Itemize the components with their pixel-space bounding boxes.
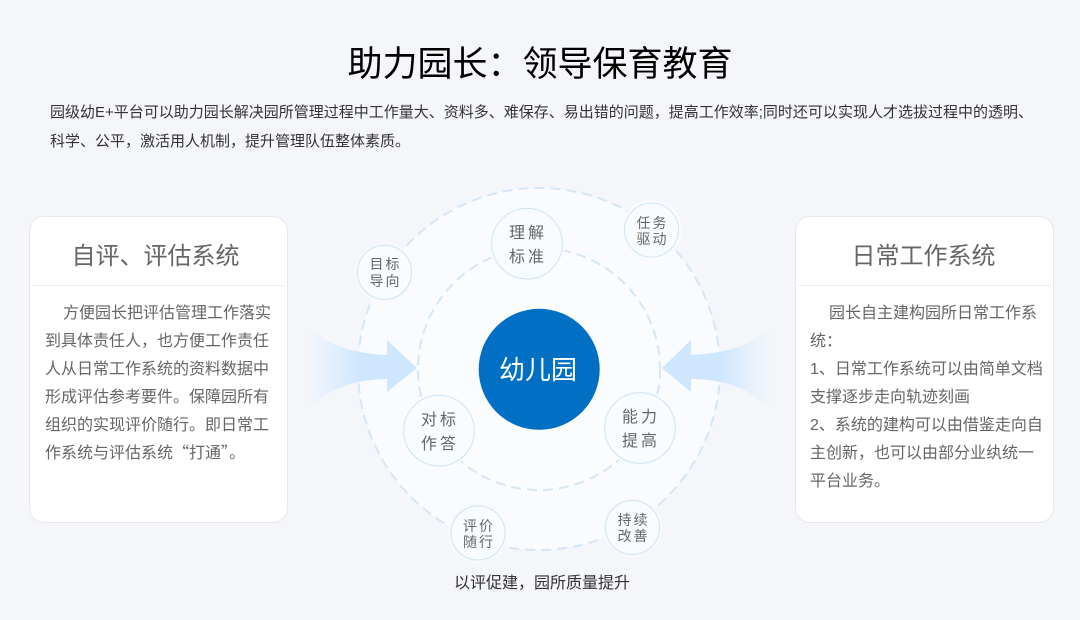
node: 对标作答: 作答 [421,435,459,453]
heading: daily work: 日常工作系统 [852,242,996,270]
node: 持续改善 [602,498,662,558]
text: self evaluation description: 组织的实现评价随行。即日常工 [45,416,269,434]
intro text: 园级幼E+平台可以助力园长解决园所管理过程中工作量大、资料多、难保存、易出错的问题，提高工作效率;同时还可以实现人才选拔过程中的透明、 [50,104,1033,121]
center circle [479,309,600,430]
text: self evaluation description: 人从日常工作系统的资料数据中 [45,360,269,378]
node: 评价随行: 评价 [463,518,495,534]
node: 能力提高 [602,390,678,466]
node: 持续改善: 持续 [618,512,650,528]
node: 理解标准: 理解 [509,224,547,242]
node: 任务驱动: 任务 [636,215,668,231]
node: 目标导向 [354,242,414,302]
text: daily work description [810,304,1043,490]
panel: self evaluation system [29,216,288,522]
title: 助力园长：领导保育教育 [347,45,732,84]
outer ring [358,188,720,550]
text: daily work description: 2、系统的建构可以由借鉴走向自 [810,416,1043,434]
node: 评价随行 [448,503,508,563]
node: 对标作答: 对标 [421,411,459,429]
text: self evaluation description: 到具体责任人，也方便工作责任 [45,332,269,350]
panel: daily work system [795,216,1054,522]
text: daily work description: 园长自主建构园所日常工作系 [829,304,1037,322]
intro text [50,104,1033,150]
text: daily work description: 统： [810,332,842,350]
text: self evaluation description: 形成评估参考要件。保障园所有 [45,388,269,406]
arrow: left [307,327,417,410]
text: self evaluation description [45,304,271,462]
node: 目标导向: 目标 [370,256,402,272]
text: daily work description: 平台业务。 [810,472,890,490]
node: 理解标准: 标准 [509,248,547,266]
arrow: right [662,327,772,410]
node: 任务驱动: 驱动 [636,231,668,247]
node: 能力提高: 提高 [622,432,660,450]
node: 能力提高: 能力 [622,408,660,426]
text: daily work description: 1、日常工作系统可以由简单文档 [810,360,1043,378]
center circle: 幼儿园 [499,355,577,385]
inner ring [418,248,660,490]
node: 对标作答 [401,393,477,469]
text: daily work description: 主创新，也可以由部分业纨统一 [810,444,1034,462]
node: 目标导向: 导向 [370,273,402,289]
text: daily work description: 支撑逐步走向轨迹刻画 [810,388,970,406]
node: 持续改善: 改善 [618,528,650,544]
heading: self evaluation: 自评、评估系统 [72,242,240,270]
text: self evaluation description: 作系统与评估系统“打通”。 [45,438,245,462]
node: 评价随行: 随行 [463,534,495,550]
node: 理解标准 [489,206,565,282]
intro text: 科学、公平，激活用人机制，提升管理队伍整体素质。 [50,133,410,150]
text: self evaluation description: 方便园长把评估管理工作落实 [63,304,271,322]
caption: 以评促建，园所质量提升 [454,575,630,592]
node: 任务驱动 [622,200,682,260]
